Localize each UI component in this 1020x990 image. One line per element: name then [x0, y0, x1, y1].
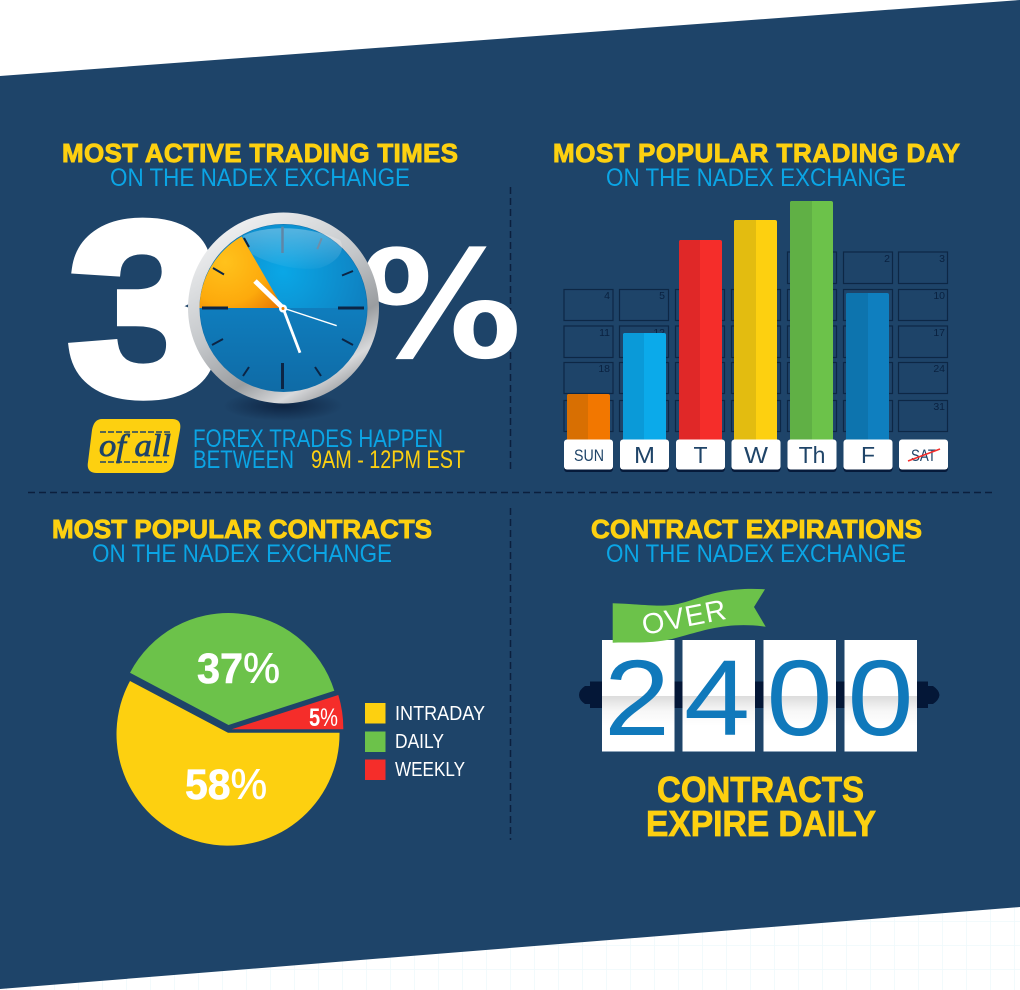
heading: most active trading times	[62, 138, 458, 192]
clock hands	[255, 281, 283, 308]
day labels: T	[693, 442, 708, 468]
heading: most active trading times: ON THE NADEX EXCHANGE	[110, 164, 410, 192]
calendar grid: 11	[599, 327, 610, 339]
calendar grid: 4	[604, 290, 610, 302]
chart: contracts pie	[117, 613, 343, 846]
bar: monday	[623, 333, 666, 440]
heading: most popular trading day	[553, 138, 960, 192]
highlighted wedge 9am to 12pm	[200, 236, 283, 308]
text: contracts expire daily: CONTRACTS	[657, 769, 864, 810]
text: contracts expire daily: EXPIRE DAILY	[646, 803, 876, 844]
slice: weekly 5 percent	[232, 695, 343, 729]
legend: WEEKLY	[395, 759, 465, 781]
calendar grid: 10	[933, 290, 945, 302]
text: forex trades happen between 9am and 12pm est	[193, 425, 465, 474]
calendar grid	[564, 252, 948, 432]
counter axle	[579, 682, 940, 708]
calendar grid: 3	[939, 253, 945, 265]
calendar grid: 24	[933, 363, 945, 375]
ribbon: over: OVER	[639, 594, 729, 642]
icon: clock	[188, 212, 379, 404]
clock shadow	[223, 391, 343, 421]
label: 37 percent: 37%	[197, 645, 280, 693]
legend	[365, 703, 485, 781]
digit card 2: 2	[604, 637, 670, 758]
chart: trading day calendar bars	[564, 201, 948, 472]
heading: contract expirations	[591, 514, 922, 568]
slice: intraday 58 percent	[117, 681, 340, 846]
heading: contract expirations: CONTRACT EXPIRATIONS	[591, 514, 922, 544]
heading: most popular trading day: ON THE NADEX EXCHANGE	[606, 164, 906, 192]
badge: of all	[88, 419, 180, 473]
calendar grid: 5	[659, 290, 665, 302]
percent sign: %	[360, 220, 522, 393]
digit card 0: 0	[848, 637, 914, 758]
legend: DAILY	[395, 731, 444, 753]
heading: most popular trading day: MOST POPULAR TRADING DAY	[553, 138, 960, 168]
heading: contract expirations: ON THE NADEX EXCHANGE	[606, 540, 906, 568]
big stat: 30 percent	[68, 172, 522, 445]
calendar grid: 31	[933, 401, 945, 413]
text: forex trades happen between 9am and 12pm est: BETWEEN	[193, 446, 294, 474]
bar: tuesday	[679, 240, 722, 440]
digit three: 3	[68, 172, 220, 445]
text: forex trades happen between 9am and 12pm est: 9AM - 12PM EST	[311, 446, 465, 474]
day labels: SUN	[574, 446, 604, 465]
text: contracts expire daily	[646, 769, 876, 844]
flip counter: 2400	[579, 637, 940, 758]
day labels: W	[744, 442, 768, 468]
heading: most popular contracts	[52, 514, 432, 568]
bar: sunday	[567, 394, 610, 440]
heading: most popular contracts: ON THE NADEX EXCHANGE	[92, 540, 392, 568]
digit card 4: 4	[684, 637, 750, 758]
day labels: Th	[799, 442, 825, 468]
calendar grid: 12	[653, 327, 665, 339]
calendar grid: 2	[884, 253, 890, 265]
day labels: SAT	[911, 446, 936, 465]
calendar grid: 18	[598, 363, 610, 375]
day labels: M	[634, 442, 655, 468]
heading: most active trading times: MOST ACTIVE TRADING TIMES	[62, 138, 458, 168]
badge: of all: of all	[99, 427, 171, 463]
heading: most popular contracts: MOST POPULAR CONTRACTS	[52, 514, 432, 544]
ribbon: over	[613, 589, 766, 643]
legend: INTRADAY	[395, 703, 485, 725]
label: 58 percent: 58%	[185, 761, 267, 809]
bar: friday	[846, 293, 889, 440]
digit card 0: 0	[766, 637, 832, 758]
text: forex trades happen between 9am and 12pm est: FOREX TRADES HAPPEN	[193, 425, 443, 453]
calendar grid: 17	[933, 327, 945, 339]
day labels: F	[861, 442, 875, 468]
bar: thursday	[790, 201, 833, 440]
day labels	[564, 440, 948, 472]
bar: wednesday	[734, 220, 777, 440]
slice: daily 37 percent	[130, 613, 334, 725]
label: 5 percent: 5%	[309, 704, 338, 732]
